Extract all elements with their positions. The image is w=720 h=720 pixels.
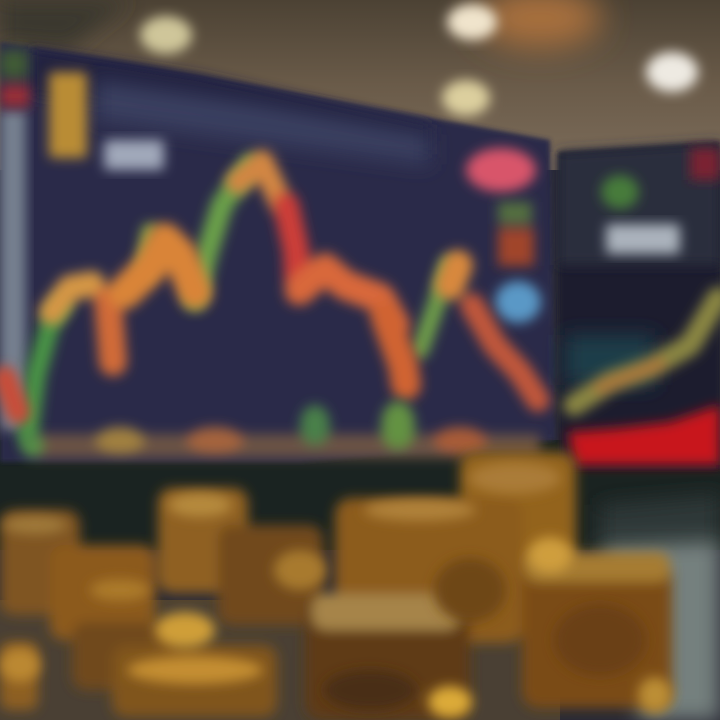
ceiling lights [140, 4, 698, 116]
gold coin highlights [0, 462, 672, 718]
right screen green icon [601, 175, 639, 209]
volume bars strip [21, 401, 540, 458]
left edge red and green tabs [0, 50, 30, 107]
ceiling [0, 0, 720, 170]
blue badge [495, 281, 541, 323]
main line chart: green underlay [28, 165, 448, 435]
back wall dark band [0, 440, 720, 550]
right screen red tag [690, 148, 720, 180]
white label [104, 140, 164, 170]
right screen teal glow [565, 335, 655, 385]
gold coin stacks [0, 452, 672, 720]
left screen edge panel [0, 110, 26, 430]
right screen line chart [574, 298, 718, 405]
main line chart: orange and red candles [5, 162, 538, 412]
red badge [466, 148, 536, 192]
right screen [558, 142, 720, 470]
floor [0, 495, 720, 720]
yellow panel [49, 72, 87, 158]
main chart screen [0, 42, 555, 462]
green and red side tags [498, 202, 534, 266]
right screen white label [606, 224, 680, 254]
right screen red area [568, 405, 720, 465]
